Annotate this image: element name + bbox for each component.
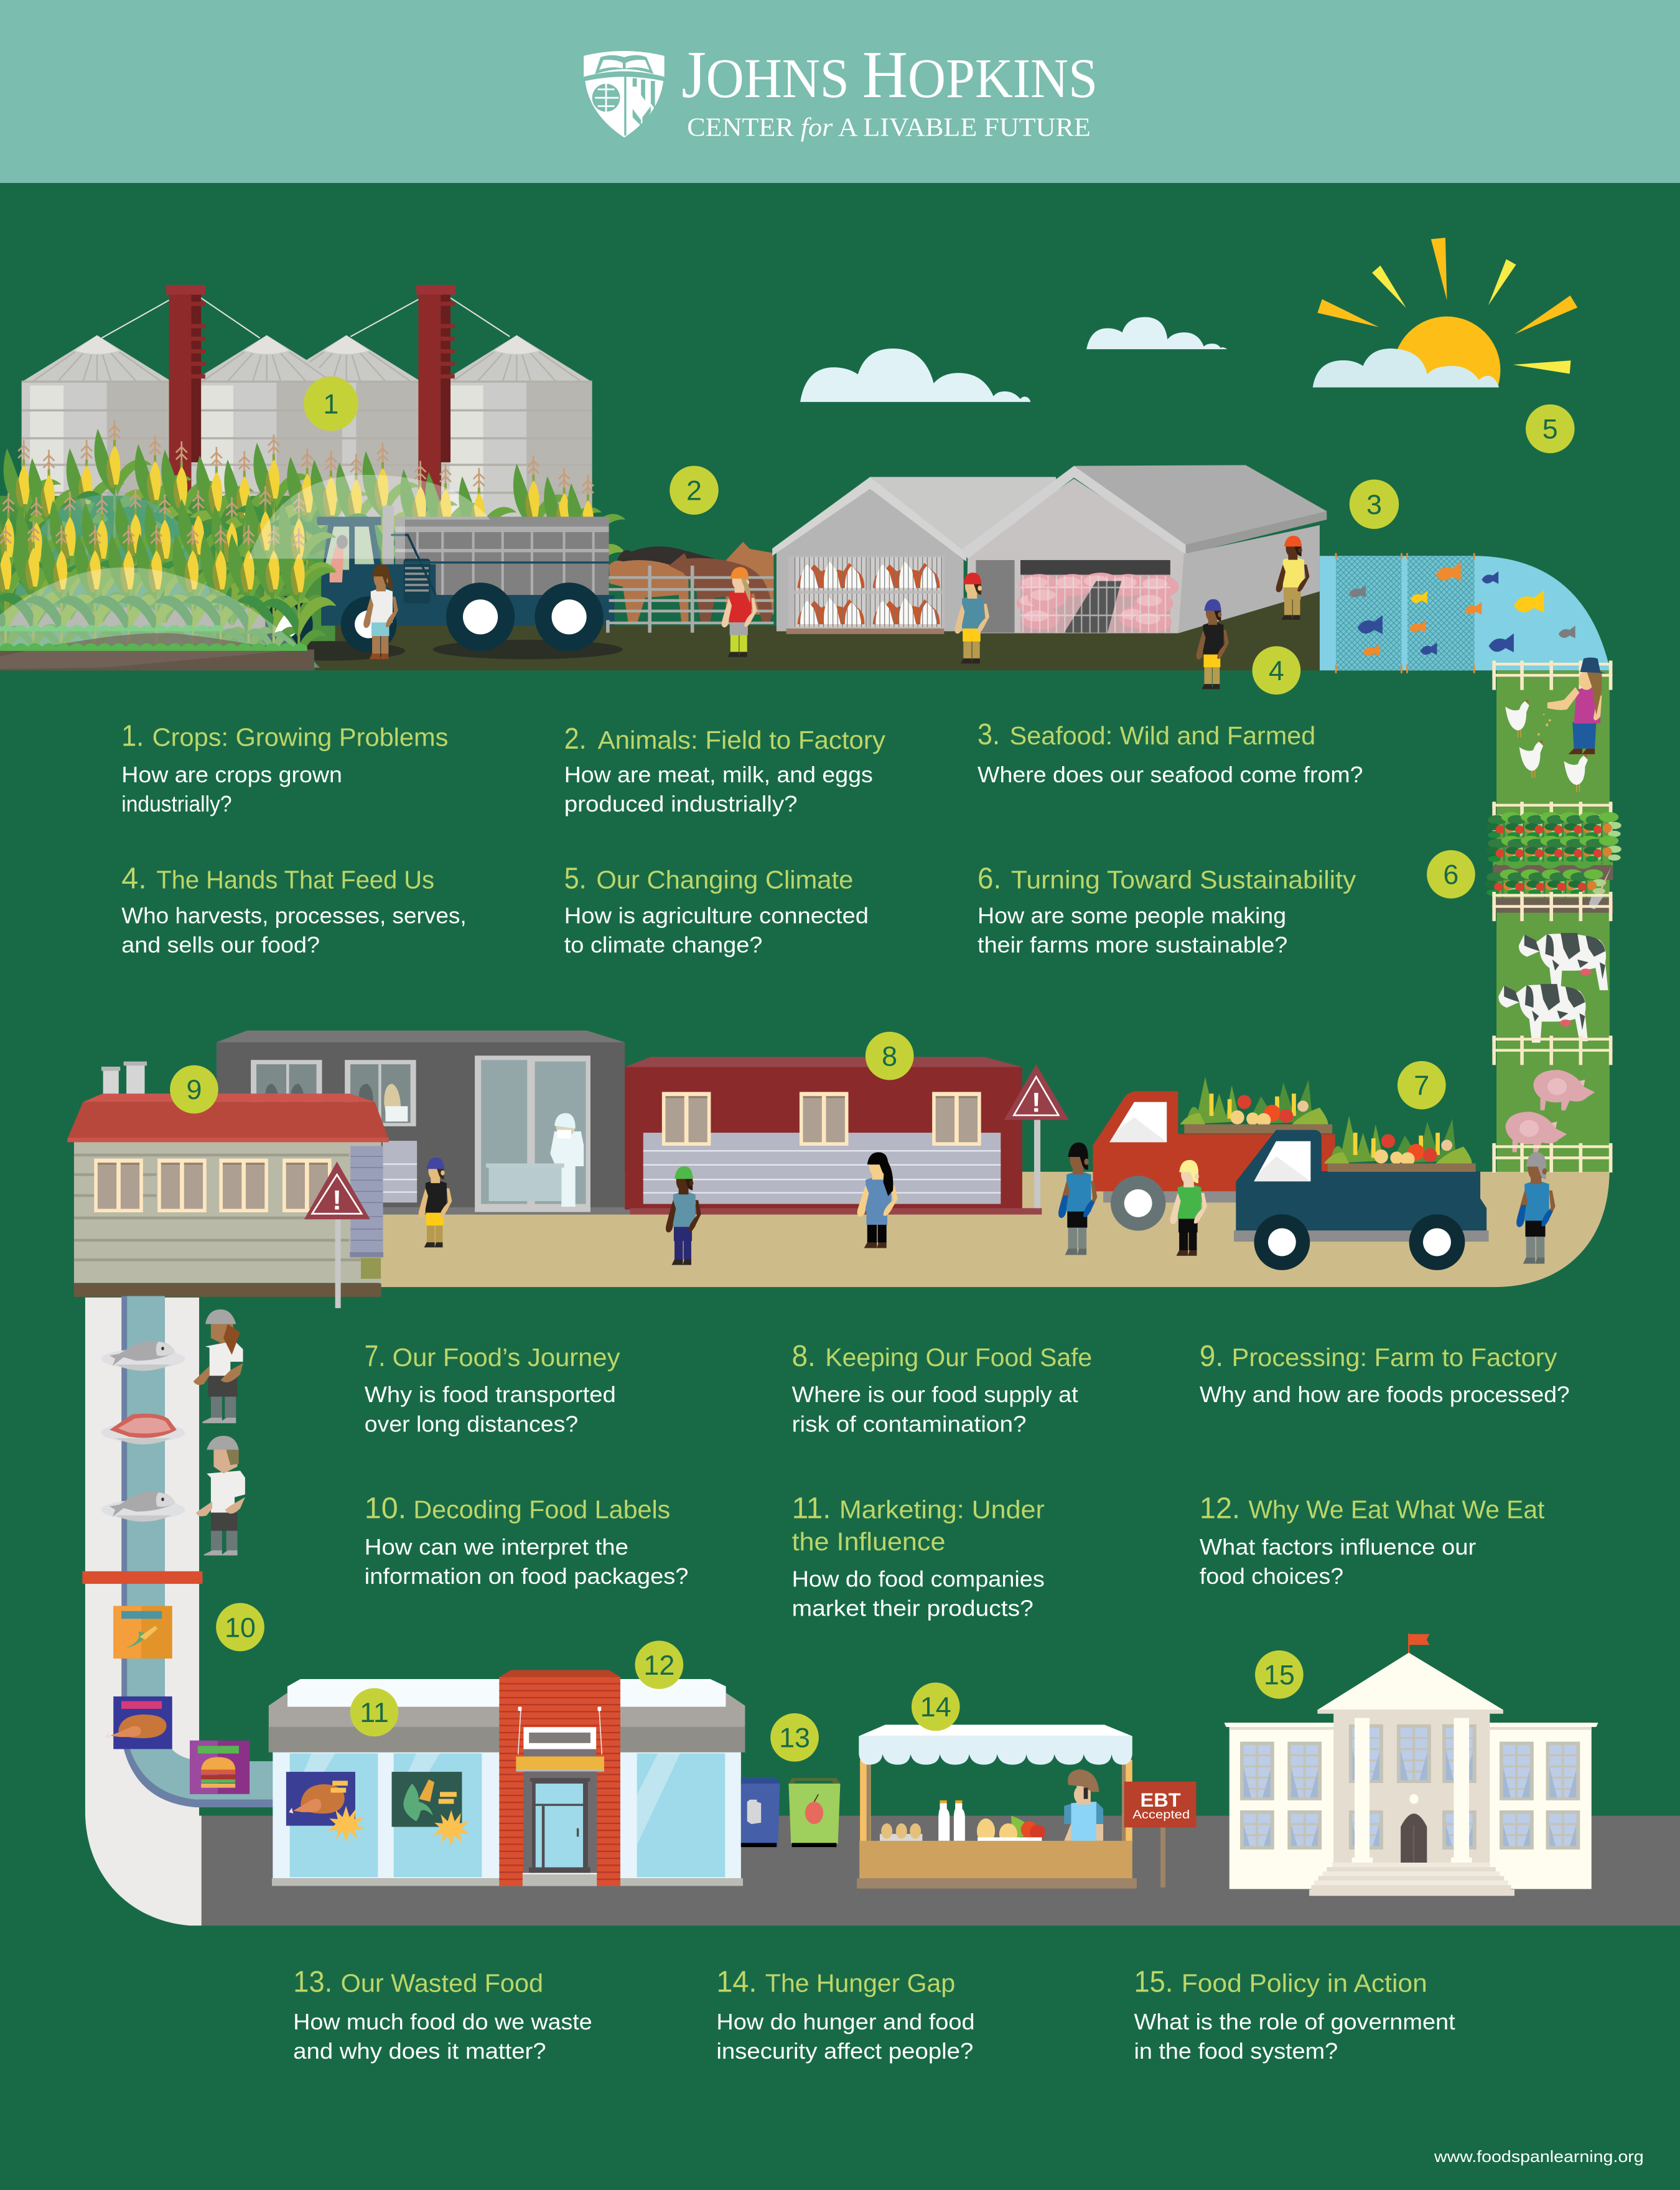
topic 10 text: 10. [365,1492,406,1525]
topic 5 text: 5. [564,861,587,895]
topic 5 text: Our Changing Climate [596,865,853,894]
drain pipe [350,1146,383,1279]
large dome [0,568,320,668]
horse tan right [725,542,773,614]
storefront glass [290,1753,725,1877]
counter [859,1841,1132,1878]
horse dark [669,553,772,624]
topic 15 text: in the food system? [1134,2039,1338,2064]
topic 1 text [121,719,448,817]
topic 1 text: How are crops grown [121,762,342,787]
wings [1230,1723,1592,1889]
topic 5 text: How is agriculture connected [564,903,869,928]
topic 11 text: 11. [792,1492,831,1525]
farmer [1547,657,1606,754]
badge 6: 6 [1443,859,1458,891]
compost bin green [788,1778,840,1847]
topic 4 text [121,861,467,958]
barn door [976,560,1015,633]
badge 8 [866,1032,914,1080]
flag [1408,1634,1429,1653]
fascia [269,1693,745,1752]
posts [860,1760,1132,1843]
badge 11 [350,1688,398,1736]
topic 4 text: 4. [121,861,147,895]
storefront wall [273,1752,741,1878]
market stall [857,1724,1137,1889]
topic 2 text [564,722,886,817]
topic 6 text: How are some people making [978,903,1286,928]
topic 11 text: the Influence [792,1527,945,1556]
topic 3 text: 3. [978,718,1000,751]
badge 12: 12 [643,1649,674,1681]
plated fish two [101,1492,185,1522]
worker blue shirt red hat [955,573,989,663]
badge 15: 15 [1264,1659,1295,1691]
pediment [1317,1653,1503,1714]
logo shield [584,51,665,138]
topic 13 text [293,1965,592,2064]
topic 14 text: How do hunger and food [716,2010,975,2034]
third row [1485,869,1606,898]
worker black shirt blue hat [1197,599,1229,689]
topic 13 text: How much food do we waste [293,2010,592,2034]
paddock fence [609,576,773,624]
warning sign right [1004,1064,1069,1208]
badge 14 [912,1683,960,1731]
fence [1492,1036,1612,1065]
worker orange hat [722,567,757,657]
white parapet [287,1679,726,1706]
worker green hat [666,1166,701,1265]
topic 14 text: insecurity affect people? [716,2039,973,2064]
topic 11 text: Marketing: Under [839,1495,1045,1524]
field foliage backing [0,496,335,650]
silo 4 [441,335,592,528]
box turkey [106,1696,172,1749]
badge 10 [216,1603,264,1651]
EBT accepted sign: EBT [1141,1789,1181,1811]
supermarket [269,1670,745,1886]
topic 5 text: to climate change? [564,933,762,958]
topic 14 text [716,1965,975,2064]
line worker one [194,1309,243,1423]
topic 8 text: 8. [792,1339,816,1373]
badge 15 [1255,1650,1304,1699]
wordmark: JOHNS HOPKINS [681,38,1098,112]
fence upper [1492,802,1612,831]
awning [516,1756,604,1772]
awning [859,1724,1132,1765]
red packing building [625,1057,1042,1215]
badge 14: 14 [920,1691,951,1723]
box corn [113,1606,172,1659]
topic 6 text [978,861,1356,958]
topic 12 text: food choices? [1200,1564,1343,1589]
silo 1 [22,335,172,528]
road asphalt [202,1816,1680,1926]
foot [383,1207,630,1215]
topic 5 text [564,861,869,958]
topic 3 text: Seafood: Wild and Farmed [1010,721,1315,750]
plated fish one [101,1341,185,1371]
topic 9 text: Why and how are foods processed? [1200,1382,1570,1407]
base ledge [272,1878,743,1886]
topic 11 text [792,1492,1045,1621]
cables [101,296,510,338]
farm grass column [1496,670,1610,1173]
topic 12 text [1200,1492,1544,1589]
topic 10 text: How can we interpret the [365,1535,628,1560]
glass doors [475,1055,590,1212]
steps [1309,1863,1514,1896]
worker at tractor [363,564,398,659]
brick tower [499,1670,620,1886]
topic 6 text: 6. [978,861,1001,895]
topic 8 text: Where is our food supply at [792,1382,1078,1407]
columns [1352,1718,1472,1863]
government building [1224,1634,1598,1896]
lab worker [550,1131,584,1207]
back row of corn [0,421,625,604]
topic 12 text: 12. [1200,1492,1240,1525]
topic 8 text: Keeping Our Food Safe [825,1343,1092,1372]
windows [94,1159,332,1212]
elevator tower left [166,285,205,502]
badge 3 [1350,479,1399,529]
right barn front [966,479,1184,634]
wing windows [1240,1742,1580,1850]
central block [1333,1713,1490,1863]
warning sign right: ! [1032,1086,1041,1118]
pig pen [1017,560,1178,633]
sky: clouds and sun [800,238,1578,402]
road tan [380,1172,1610,1287]
topic 9 text: Processing: Farm to Factory [1232,1343,1557,1372]
poster corn [392,1772,469,1846]
worker black hair blue shirt [857,1153,898,1248]
wheels [257,583,604,652]
topic 14 text: The Hunger Gap [765,1968,955,1997]
fence [1492,1143,1612,1172]
topic 1 text: 1. [121,719,144,752]
topic 13 text: and why does it matter? [293,2039,546,2064]
topic 4 text: The Hands That Feed Us [156,865,434,894]
animal barns [772,465,1327,634]
foot [630,1208,1042,1215]
farmer feeding hens [1492,657,1612,792]
badge 5: 5 [1542,413,1558,445]
conveyor column [82,1296,1680,1926]
sub wordmark: CENTER for A LIVABLE FUTURE [687,113,1091,142]
soil [0,650,314,670]
red scanning bar [82,1571,202,1584]
worker green shirt blonde [1170,1160,1207,1256]
worker black shirt yellow shorts [419,1158,452,1247]
plant rows [1486,812,1622,864]
website url: www.foodspanlearning.org [1434,2148,1644,2166]
cloud large [800,349,1030,402]
left barn wall [777,485,964,631]
ground strip of the farm [315,591,1320,670]
corn field with irrigation domes [0,475,490,670]
topic 10 text: Decoding Food Labels [413,1495,670,1524]
topic 6 text: Turning Toward Sustainability [1011,865,1356,894]
right barn side wall [1178,525,1320,634]
tractor with grain trailer [251,505,623,661]
line worker two [196,1436,245,1555]
cows in pasture [1492,933,1612,1065]
upper dome [249,475,490,559]
soil bed [1493,865,1613,880]
topic 3 text [978,718,1363,787]
badge 6 [1427,850,1475,899]
pigs in pasture [1492,1070,1612,1172]
badge 2: 2 [686,474,702,506]
topic 10 text [365,1492,688,1589]
topic 12 text: Why We Eat What We Eat [1248,1495,1544,1524]
topic 7 text: Our Food’s Journey [393,1343,620,1372]
topic 3 text: Where does our seafood come from? [978,762,1363,787]
hens [1505,700,1588,792]
sun [1317,238,1578,386]
roof [67,1093,389,1142]
badge 1 [304,377,358,431]
badge 2 [670,466,719,515]
badge 9 [170,1065,218,1113]
topic 15 text: Food Policy in Action [1182,1968,1427,1997]
topic 4 text: and sells our food? [121,933,320,958]
topic 2 text: Animals: Field to Factory [598,726,886,754]
feed [1538,714,1551,736]
box burger [190,1741,250,1794]
topic 11 text: market their products? [792,1596,1034,1621]
warning sign left: ! [332,1184,342,1216]
fence [1492,661,1612,690]
plated meat [101,1413,185,1444]
cow black [617,546,715,576]
cloud small [1086,317,1227,349]
badge 13: 13 [779,1722,810,1754]
livestock behind paddock fence [606,542,773,633]
conveyor belt [121,1296,274,1807]
topic 2 text: 2. [564,722,587,756]
badge 3: 3 [1366,489,1382,520]
topic 8 text [792,1339,1092,1436]
seedlings [0,643,307,651]
vendor [1064,1769,1103,1841]
worker blue apron one [1058,1143,1097,1255]
topic 14 text: 14. [716,1965,757,1998]
topic 7 text: 7. [365,1339,385,1373]
topic 6 text: their farms more sustainable? [978,933,1287,958]
badge 12 [635,1640,683,1689]
topic 9 text: 9. [1200,1339,1223,1373]
badge 7 [1398,1061,1446,1110]
warning sign left [304,1162,370,1308]
lab building grey [217,1031,630,1215]
left barn roof [870,477,1074,551]
eggs [880,1823,922,1842]
door [1401,1794,1427,1863]
worker blue apron two [1516,1153,1556,1264]
fence lower [1492,892,1612,921]
topic 7 text: over long distances? [365,1411,578,1436]
vegetable garden [1485,802,1622,921]
topic 2 text: How are meat, milk, and eggs [564,762,873,787]
topic 7 text [365,1339,620,1436]
siding panel [643,1133,1001,1204]
topic 1 text: Crops: Growing Problems [152,723,448,751]
upper windows [251,1060,416,1126]
number badges [170,377,1575,1762]
shovel [1589,866,1612,907]
topic 15 text: What is the role of government [1134,2010,1455,2034]
silos and grain elevators [22,285,592,528]
horse light brown [609,560,688,624]
processing plant building [67,1062,389,1297]
produce [977,1816,1045,1845]
badge 1: 1 [323,388,338,419]
door [523,1771,597,1886]
topic 11 text: How do food companies [792,1566,1045,1591]
right barn side roof [1074,465,1327,551]
trailer [395,517,609,595]
header band [0,0,1680,183]
recycling bin blue [741,1778,780,1847]
teal dome [10,494,217,650]
topic 13 text: Our Wasted Food [341,1968,543,1997]
topic 12 text: What factors influence our [1200,1535,1476,1560]
topic 9 text [1200,1339,1570,1407]
topic 2 text: produced industrially? [564,792,798,817]
topic 15 text: 15. [1134,1965,1173,1998]
blue delivery truck [1234,1116,1489,1270]
topic 8 text: risk of contamination? [792,1411,1027,1436]
topic 15 text [1134,1965,1455,2064]
badge 8: 8 [882,1040,897,1072]
elevator tower right [416,285,455,502]
EBT accepted sign [1124,1782,1197,1888]
badge 4: 4 [1269,655,1284,686]
hen cages [786,556,945,634]
topic 7 text: Why is food transported [365,1382,616,1407]
hanging sign [518,1706,602,1756]
windows [662,1092,981,1146]
badge 13 [770,1713,819,1762]
wheel shadows [433,640,623,659]
badge 10: 10 [225,1611,256,1643]
lower siding [383,1141,417,1202]
milk bottles [938,1800,965,1841]
cloud by sun [1313,349,1499,388]
fish pond with net pens [1320,553,1610,673]
grey greenhouse row [0,607,265,630]
topic 10 text: information on food packages? [365,1564,688,1589]
chimneys [101,1062,147,1098]
badge 11: 11 [360,1696,389,1728]
poster turkey [286,1772,364,1842]
central windows [1349,1724,1477,1850]
tractor cab [317,505,615,625]
topic 1 text: industrially? [121,792,232,817]
topic 13 text: 13. [293,1965,332,1998]
worker yellow shirt orange hat [1276,536,1309,620]
silo 2 [191,335,342,528]
EBT accepted sign: Accepted [1132,1809,1190,1822]
badge 4 [1253,646,1300,695]
badge 5 [1526,405,1575,453]
badge 7: 7 [1414,1070,1429,1101]
topic 4 text: Who harvests, processes, serves, [121,903,467,928]
silo back [271,335,422,528]
badge 9: 9 [186,1074,202,1105]
red delivery truck [1093,1077,1335,1231]
